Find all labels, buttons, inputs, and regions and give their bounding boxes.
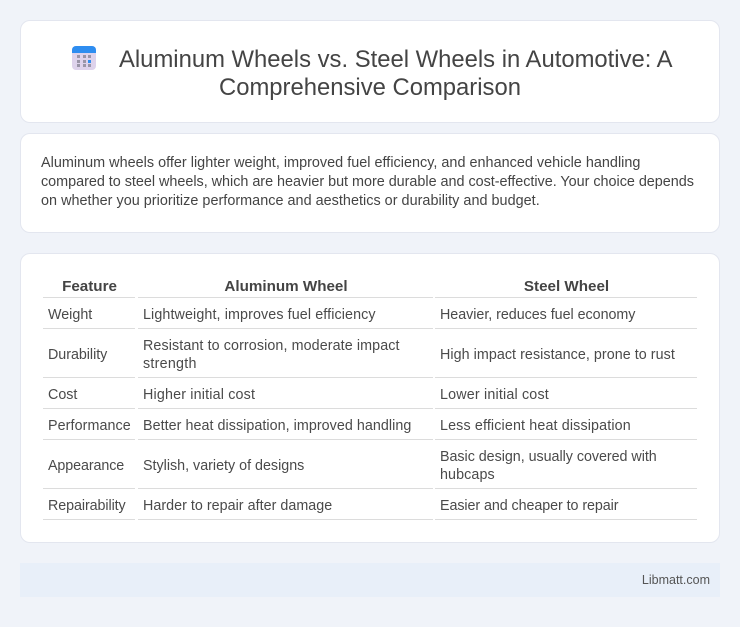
summary text: Aluminum wheels offer lighter weight, improved fuel efficiency, and enhanced vehicle handling [41,155,640,171]
row: Appearance: Stylish, variety of designs [143,458,304,474]
row: Durability: High impact resistance, prone to rust [440,347,675,363]
footer credit: Libmatt.com [642,573,710,587]
row: Cost: Lower initial cost [440,387,549,403]
row: Appearance: Basic design, usually covered with [440,449,657,465]
header: Aluminum Wheel: Aluminum Wheel [224,278,348,295]
row: Repairability: Harder to repair after damage [143,498,332,514]
row: Repairability [48,498,618,514]
row: Appearance: Appearance [48,458,124,474]
row: Weight: Weight [48,307,92,323]
title line 1: Aluminum Wheels vs. Steel Wheels in Automotive: A [119,46,673,73]
row: Cost [48,387,549,403]
row: Performance [48,418,631,434]
row: Durability [48,338,675,372]
row: Appearance: hubcaps [440,467,495,483]
row: Weight: Heavier, reduces fuel economy [440,307,635,323]
row: Durability: Durability [48,347,107,363]
row: Repairability: Repairability [48,498,126,514]
summary text: on whether you prioritize performance and aesthetics or durability and budget. [41,193,540,209]
summary text [41,155,694,209]
panel: comparison table [20,253,720,543]
row: Weight: Lightweight, improves fuel efficiency [143,307,376,323]
header: Feature: Feature [62,278,117,295]
summary text: compared to steel wheels, which are heavier but more durable and cost-effective. Your choice depends [41,174,694,190]
row: Performance: Performance [48,418,131,434]
footer [20,563,720,597]
row: Performance: Better heat dissipation, improved handling [143,418,411,434]
row: Durability: Resistant to corrosion, moderate impact [143,338,400,354]
row: Appearance [48,449,657,483]
panel: summary [20,133,720,233]
header: Steel Wheel: Steel Wheel [524,278,609,295]
row: Repairability: Easier and cheaper to repair [440,498,618,514]
row: Weight [48,307,636,323]
panel: title [20,20,720,123]
row: Cost: Higher initial cost [143,387,255,403]
row: Cost: Cost [48,387,77,403]
row: Performance: Less efficient heat dissipation [440,418,631,434]
icon: calendar [72,46,96,70]
row: Durability: strength [143,356,197,372]
title line 2: Comprehensive Comparison [219,74,521,101]
